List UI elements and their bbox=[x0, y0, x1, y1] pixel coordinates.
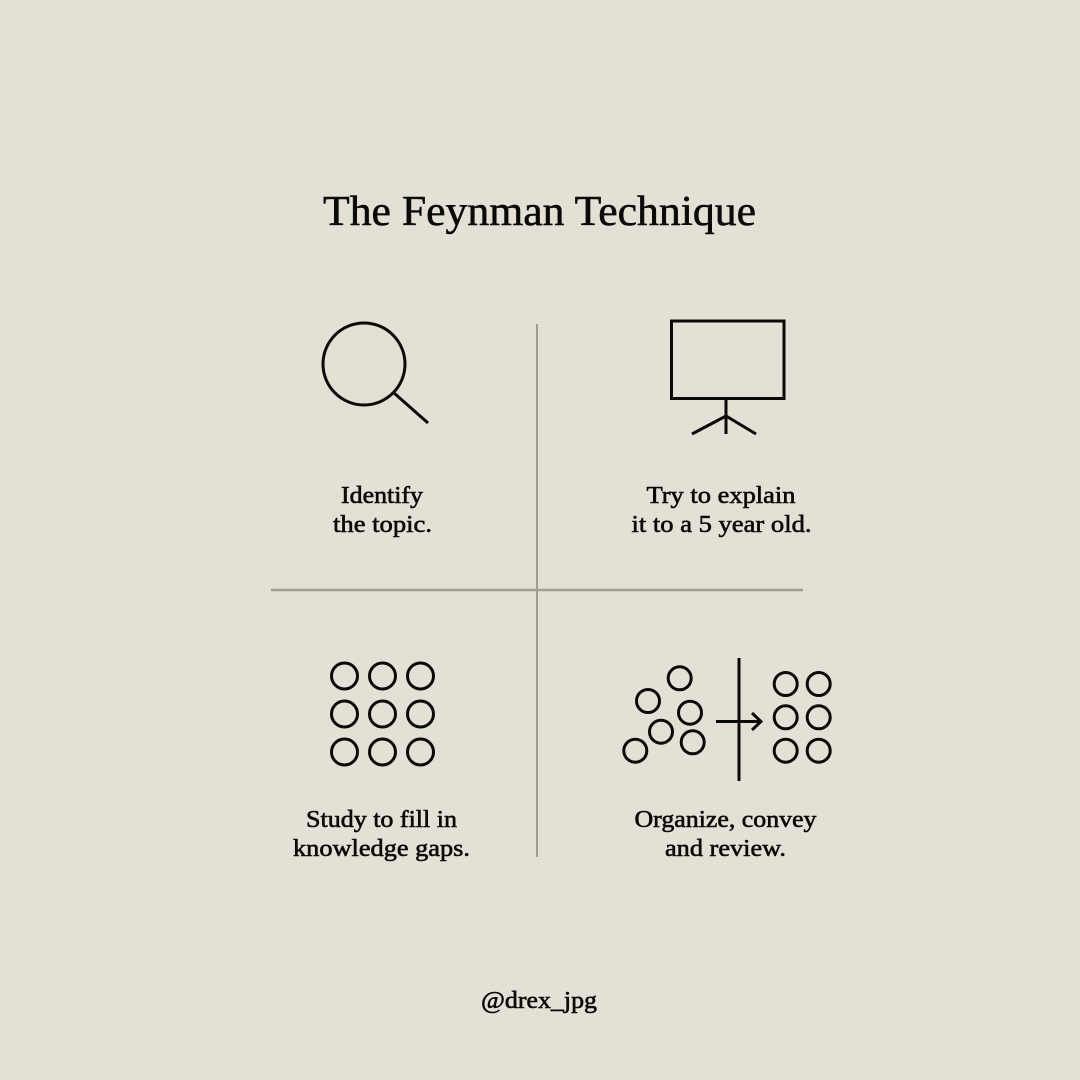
text: study to fill in knowledge gaps bbox=[293, 807, 470, 862]
icon: scattered circles organised across a divider bbox=[624, 658, 830, 781]
text: organize, convey and review bbox=[634, 807, 816, 862]
text: study to fill in knowledge gaps: knowledge gaps. bbox=[293, 836, 470, 862]
icon: magnifying glass bbox=[323, 323, 428, 423]
divider: vertical bbox=[536, 324, 538, 857]
title: The Feynman Technique bbox=[323, 189, 756, 235]
text: identify the topic: Identify bbox=[341, 483, 423, 509]
divider: horizontal bbox=[271, 589, 803, 591]
icon: circle grid bbox=[332, 663, 434, 765]
text: explain to a 5 year old bbox=[632, 483, 812, 538]
text: identify the topic: the topic. bbox=[333, 512, 432, 538]
text: study to fill in knowledge gaps: Study to fill in bbox=[306, 807, 457, 833]
text: organize, convey and review: Organize, convey bbox=[634, 807, 816, 833]
text: identify the topic bbox=[333, 483, 432, 538]
text: organize, convey and review: and review. bbox=[665, 836, 786, 862]
credit handle: @drex_jpg bbox=[481, 988, 597, 1014]
text: explain to a 5 year old: Try to explain bbox=[646, 483, 796, 509]
icon: presentation board bbox=[672, 321, 784, 434]
text: explain to a 5 year old: it to a 5 year old. bbox=[632, 512, 812, 538]
